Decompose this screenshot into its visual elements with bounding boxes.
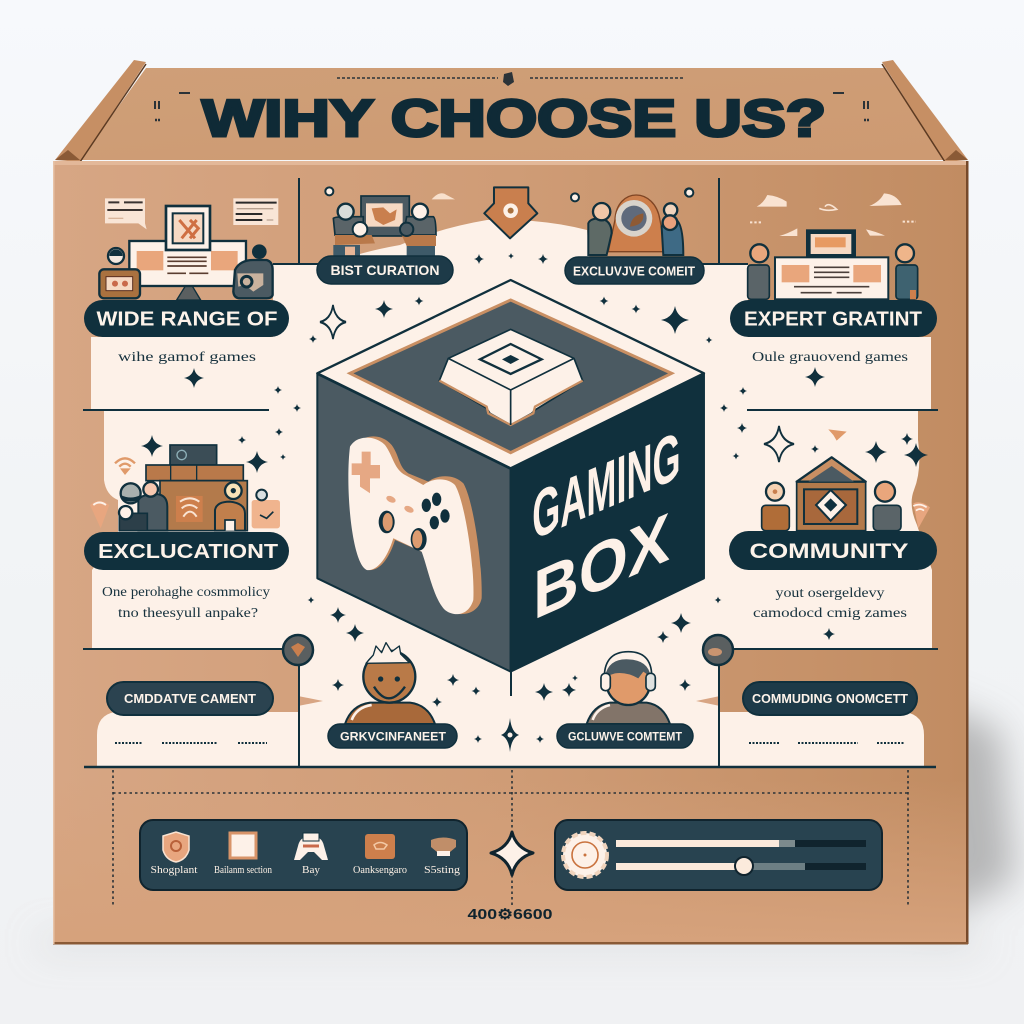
cardboard box lid: [55, 60, 968, 162]
box side label: [532, 417, 681, 635]
lid dashed ornament: [155, 72, 869, 120]
title: WIHY CHOOSE US?: [202, 90, 826, 148]
dashed guide lines: [113, 770, 908, 905]
large outlined star: [491, 832, 533, 875]
icon: gamepad: [294, 833, 328, 860]
pill: cmddative cament: [107, 682, 273, 715]
pill: gclulve comtemt: [557, 724, 693, 748]
slider two: [616, 857, 866, 875]
gaming box 3D illustration: [317, 280, 704, 672]
icon: orange folder: [365, 834, 395, 859]
panel icon: community house: [762, 429, 930, 531]
controller icon: [348, 436, 482, 614]
pill: gclulve comtemt: GCLUWVE COMTEMT: [568, 732, 682, 744]
pill: commuding onomcett: [743, 682, 917, 715]
cream background panel: [91, 220, 932, 767]
pill: community: [729, 531, 937, 570]
pill: best curation: BIST CURATION: [330, 263, 440, 278]
sparkles: [141, 253, 928, 743]
pill: community: COMMUNITY: [750, 540, 908, 563]
text: exclucationt description: [102, 585, 270, 621]
box side label: BOX: [533, 498, 670, 635]
feature labels: Oanksengaro: [353, 865, 407, 876]
connector node left: [283, 635, 313, 665]
dotted rows right: [749, 742, 905, 744]
panel icon: wide range of games: [99, 198, 278, 300]
text: community description: [753, 586, 907, 621]
pill: cmddative cament: CMDDATVE CAMENT: [124, 691, 256, 706]
icon: gear disc: [563, 833, 607, 877]
pill: best curation: [317, 256, 453, 284]
pill: grkvcinfaneet: GRKVCINFANEET: [340, 732, 446, 744]
divider lines: [83, 178, 938, 767]
text: exclucationt description: One perohaghe cosmmolicy: [102, 585, 270, 600]
feature labels: [150, 865, 460, 876]
text: community description: yout osergeldevy: [776, 586, 884, 601]
slider one: [616, 840, 866, 847]
pill: exclusive content: EXCLUVJVE COMEIT: [573, 264, 695, 278]
dimension label: 400⚙6600: [468, 907, 552, 923]
panel icon: education boxes and people: [90, 445, 280, 531]
pill: grkvcinfaneet: [328, 724, 457, 748]
box top face: [317, 280, 704, 468]
icon: shield: [163, 832, 189, 862]
box right face: [511, 374, 704, 672]
feature labels: Shogplant: [150, 865, 198, 876]
outlined sparkles: [320, 305, 794, 462]
icon: square tile: [230, 833, 256, 858]
avatar: person with headset: [587, 652, 670, 724]
pill: expert gratint: EXPERT GRATINT: [744, 308, 922, 330]
center small sparkle: [501, 718, 519, 752]
pill: exclusive content: [565, 257, 704, 284]
panel icon: exclusive content: [571, 188, 693, 255]
pill: expert gratint: [730, 300, 937, 337]
panel icon: expert curation: [685, 189, 918, 299]
box cast shadow: [40, 700, 1015, 948]
shield badge icon: [484, 187, 537, 238]
pill: wide range of: [84, 300, 289, 337]
pill: wide range of: WIDE RANGE OF: [96, 308, 278, 330]
feature labels: Bay: [302, 865, 320, 876]
cardboard box front: [53, 161, 968, 944]
text: wide range description: wihe gamof games: [118, 350, 256, 365]
box left face: [317, 374, 511, 672]
avatar: smiling person: [345, 643, 435, 724]
connector node right: [703, 635, 733, 665]
text: community description: camodocd cmig zames: [753, 606, 907, 621]
icon: mushroom shape: [431, 838, 456, 856]
feature labels: Bailanm section: [214, 865, 272, 876]
dotted rows left: [115, 742, 267, 744]
features panel: [140, 820, 467, 890]
pill: commuding onomcett: COMMUDING ONOMCETT: [752, 691, 908, 706]
feature labels: S5sting: [424, 865, 460, 876]
text: expert description: Oule grauovend games: [752, 350, 908, 365]
pill: exclucationt: EXCLUCATIONT: [98, 541, 278, 563]
center vertical tick: [510, 672, 512, 696]
slider panel: [555, 820, 882, 890]
lid inset: [350, 300, 672, 453]
box side label: GAMING: [532, 417, 681, 554]
text: exclucationt description: tno theesyull anpake?: [118, 606, 258, 621]
small tan pointers: [298, 696, 720, 706]
pill: exclucationt: [84, 532, 289, 570]
panel icon: best curation: [325, 187, 455, 256]
lid pedestal icon: [439, 329, 583, 425]
